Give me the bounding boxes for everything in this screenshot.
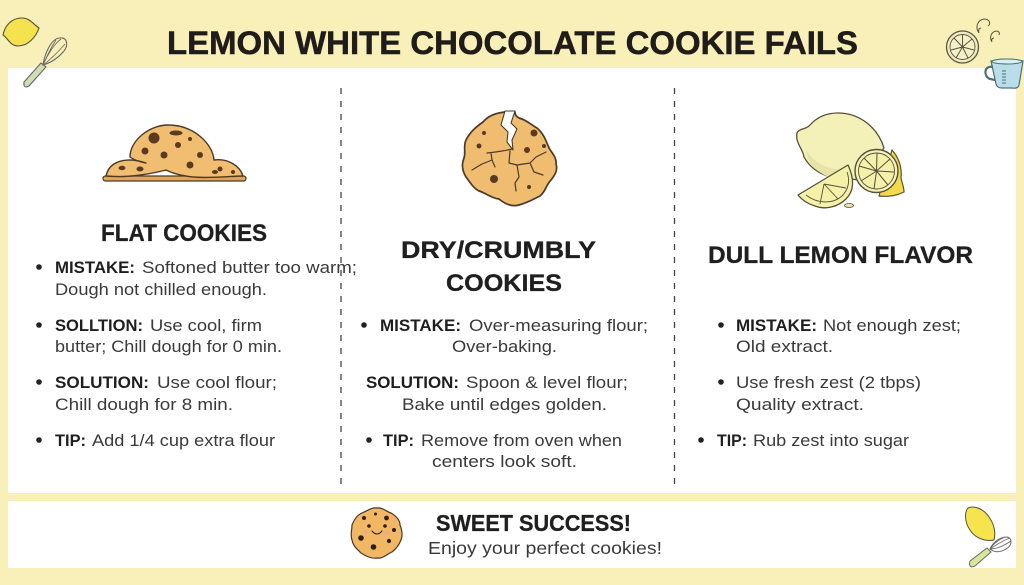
item: mistake [36,258,357,299]
item: solution two: Use cool flour; [157,373,277,392]
icon: lemons [797,113,904,208]
item: solution one: butter; Chill dough for 0 min. [55,337,282,356]
icon: steam curls [977,19,999,42]
panel: main white card [8,68,1016,493]
panel: dull lemon flavor column [698,113,973,450]
heading: dry crumbly cookies: COOKIES [446,270,562,297]
icon: footer lemon [966,507,995,541]
icon: smiling cookie [351,508,402,558]
item: solution: SOLUTION: [366,373,459,392]
icon: lemon slice top right [946,31,978,63]
panel: flat cookies column [36,125,357,450]
item: mistake [361,316,648,356]
item: mistake: Softoned butter too warm; [142,258,357,277]
item: tip: Add 1/4 cup extra flour [92,431,275,450]
heading: flat cookies: FLAT COOKIES [101,220,267,247]
item: mistake: Over-measuring flour; [469,316,648,335]
icon: footer whisk [970,537,1011,567]
icon: cracked cookie [463,111,557,206]
item: solution one: SOLLTION: [55,316,143,335]
item: tip: Rub zest into sugar [753,431,909,450]
panel: footer band [8,501,1016,568]
item: tip: TIP: [55,431,86,450]
heading: dry crumbly cookies: DRY/CRUMBLY [401,237,596,264]
item: mistake: MISTAKE: [736,316,817,335]
item: tip: Remove from oven when [421,431,622,450]
item: solution two [36,373,277,414]
item: tip: centers look soft. [432,452,577,471]
item: solution: Spoon & level flour; [466,373,628,392]
heading: dry crumbly cookies [401,237,596,297]
panel: dry crumbly cookies column [361,111,648,471]
item: solution: Use fresh zest (2 tbps) [736,373,921,392]
item: mistake: MISTAKE: [55,258,135,277]
title: LEMON WHITE CHOCOLATE COOKIE FAILS [167,25,858,61]
heading: dull lemon flavor: DULL LEMON FLAVOR [708,242,973,269]
item: solution: Bake until edges golden. [402,395,607,414]
item: solution two: SOLUTION: [55,373,149,392]
item: solution [366,373,628,414]
item: solution one: Use cool, firm [150,316,262,335]
item: solution: Quality extract. [736,395,864,414]
item: mistake: Dough not chilled enough. [55,280,267,299]
item: mistake: Old extract. [736,337,833,356]
item: solution two: Chill dough for 8 min. [55,395,233,414]
item: tip: TIP: [717,431,747,450]
icon: measuring cup [985,59,1023,88]
item: mistake: Over-baking. [452,337,557,356]
item: tip [366,431,622,471]
footer heading: SWEET SUCCESS! [436,510,631,536]
icon: whisk top left [24,38,67,87]
icon: flat melted cookie [103,125,246,181]
item: tip [698,431,909,450]
item: mistake: Not enough zest; [823,316,961,335]
item: mistake: MISTAKE: [380,316,461,335]
footer text: Enjoy your perfect cookies! [428,538,662,558]
item: solution one [36,316,282,356]
icon: lemon top left [3,18,39,46]
item: solution [718,373,921,414]
item: mistake [718,316,961,356]
item: tip: TIP: [383,431,414,450]
